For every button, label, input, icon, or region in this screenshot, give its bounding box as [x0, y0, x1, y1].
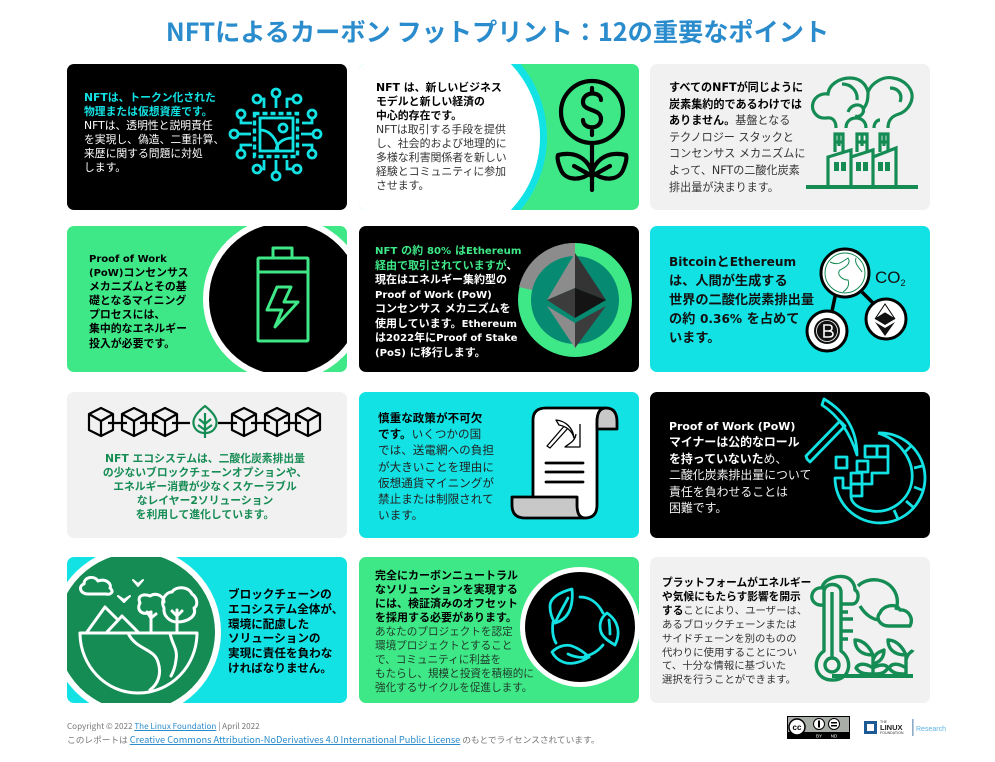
text: proof of work energy: プロセスには、 [89, 308, 165, 321]
text: careful policy: います。 [378, 508, 423, 522]
panel: proof of work energy [67, 226, 347, 372]
text: ecosystem responsibility: ソリューションの [228, 631, 321, 645]
icon: circuit chip with image [228, 88, 322, 182]
text: miners accountability: マイナーは公的なロール [669, 435, 800, 449]
text: careful policy: が大きいことを理由に [378, 460, 494, 474]
text: proof of work energy: Proof of Work [89, 254, 167, 265]
text: NFT definition: を実現し、偽造、二重計算、 [84, 133, 224, 146]
icon: pickaxe and crescent coin [804, 398, 926, 524]
text: NFT definition [84, 91, 224, 174]
text: ethereum share: コンセンサス メカニズムを [375, 302, 511, 315]
text: bitcoin and ethereum emissions: います。 [669, 331, 720, 346]
text: new business model: 経験とコミュニティに参加 [376, 165, 506, 178]
text: carbon neutral offsets: には、検証済みのオフセット [375, 597, 518, 610]
text: miners accountability: Proof of Work (PoW) [669, 420, 795, 433]
text: ecosystem evolving [103, 452, 307, 521]
text: ecosystem responsibility: ブロックチェーンの [228, 587, 332, 601]
title: NFTによるカーボン フットプリント：12の重要なポイント [166, 13, 829, 49]
text: platform disclosure: サイドチェーンを別のものの [662, 633, 797, 645]
text: ethereum share: 経由で取引されていますが、 [375, 258, 517, 272]
text: ecosystem evolving: なレイヤー2ソリューション [137, 494, 273, 507]
panel: ecosystem evolving [67, 392, 347, 538]
text: platform disclosure: することにより、ユーザーは、 [662, 604, 807, 617]
panel: platform disclosure [650, 557, 930, 703]
text: ecosystem responsibility: 実現に責任を負わな [228, 646, 332, 660]
text: carbon neutral offsets: あなたのプロジェクトを認定 [375, 626, 513, 638]
panel: miners accountability [650, 392, 930, 538]
text: not all NFTs equal: よって、NFTの二酸化炭素 [669, 164, 800, 177]
panel: new business model [359, 64, 639, 210]
text: not all NFTs equal: 炭素集約的であるわけでは [669, 98, 802, 111]
footer: copyright and license [67, 721, 600, 746]
text: carbon neutral offsets: もたらし、規模と投資を積極的に [375, 668, 534, 680]
text: bitcoin and ethereum emissions: BitcoinとEthereum [669, 255, 796, 270]
text: ethereum share: は2022年にProof of Stake [375, 331, 517, 344]
text: ethereum share: 現在はエネルギー集約型の [375, 273, 507, 286]
text: NFT definition: します。 [84, 161, 126, 174]
text: new business model [376, 81, 507, 192]
icon: factory with smoke [806, 76, 918, 189]
text: ecosystem responsibility: エコシステム全体が、 [228, 602, 343, 616]
text: careful policy: です。いくつかの国 [378, 427, 481, 441]
icon: landscape with trees [78, 576, 198, 694]
text: NFT definition: 来歴に関する問題に対処 [84, 147, 203, 160]
text: carbon neutral offsets: 完全にカーボンニュートラル [375, 569, 518, 582]
icon: battery with bolt [256, 246, 310, 342]
text: miners accountability: を持っていないため、 [669, 452, 787, 466]
text: not all NFTs equal: コンセンサス メカニズムに [669, 147, 805, 160]
icon: ethereum ring [518, 243, 632, 357]
icon: creative commons badge: ND [831, 734, 838, 738]
text: bitcoin and ethereum emissions: は、人間が生成する [669, 274, 788, 289]
text: platform disclosure: や気候にもたらす影響を開示 [662, 590, 801, 603]
text: carbon neutral offsets: 環境プロジェクトとすること [375, 640, 512, 652]
text: proof of work energy: メカニズムとその基 [89, 280, 187, 293]
icon: dollar flower [556, 78, 628, 192]
text: ecosystem responsibility: 環境に配慮した [228, 617, 309, 631]
text: ecosystem evolving: エネルギー消費が少なくスケーラブル [113, 480, 297, 493]
text: not all NFTs equal: テクノロジー スタックと [669, 131, 794, 144]
text: miners accountability: 責任を負わせることは [669, 485, 788, 499]
text: NFT definition: NFTは、トークン化された [84, 91, 216, 104]
text: new business model: モデルと新しい経済の [376, 95, 485, 108]
text: new business model: 中心的存在です。 [376, 109, 462, 122]
logo: Linux Foundation Research: LINUX [880, 723, 902, 732]
icon: creative commons badge [787, 716, 850, 739]
panel: ecosystem responsibility [67, 557, 347, 703]
text: platform disclosure: あるブロックチェーンまたは [662, 619, 797, 631]
text: new business model: させます。 [376, 179, 429, 192]
text: new business model: し、社会的および地理的に [376, 137, 507, 150]
text: carbon neutral offsets: なソリューションを実現する [375, 583, 518, 596]
text: ethereum share: (PoS) に移行します。 [375, 346, 486, 358]
text: platform disclosure: 選択を行うことができます。 [662, 674, 796, 686]
text: carbon neutral offsets: で、コミュニティに利益を [375, 654, 501, 666]
text: proof of work energy: 礎となるマイニング [89, 294, 186, 307]
text: ecosystem evolving: NFT エコシステムは、二酸化炭素排出量 [105, 452, 305, 465]
text: proof of work energy: 投入が必要です。 [89, 337, 175, 350]
text: new business model: NFTは取引する手段を提供 [376, 123, 506, 136]
panel: careful policy [359, 392, 639, 538]
icon: globe, bitcoin, ethereum, CO2 [806, 248, 908, 352]
label: CO2: CO [875, 268, 900, 287]
footer: copyright and license: Copyright © 2022 The Linux Foundation | April 2022 [67, 721, 260, 732]
text: carbon neutral offsets [375, 569, 534, 694]
text: proof of work energy: 集中的なエネルギー [89, 322, 187, 335]
text: ethereum share [375, 244, 521, 358]
icon: scroll with pickaxe [510, 406, 618, 520]
text: bitcoin and ethereum emissions: の約 0.36% を占めて [669, 312, 799, 327]
icon: creative commons badge: BY [816, 734, 822, 738]
panel: carbon neutral offsets [359, 557, 639, 703]
text: proof of work energy [89, 254, 189, 350]
icon: thermometer, clouds and plants [810, 574, 914, 682]
text: miners accountability [669, 420, 811, 515]
text: ethereum share: NFT の約 80% はEthereum [375, 244, 521, 257]
label: CO2: 2 [900, 278, 906, 288]
footer: copyright and license: このレポートは Creative Commons Attribution-NoDerivatives 4.0 International Public License のもとでライセンスされています。 [67, 732, 600, 746]
text: not all NFTs equal: ありません。基盤となる [669, 114, 790, 127]
text: proof of work energy: (PoW)コンセンサス [89, 266, 189, 279]
text: not all NFTs equal: すべてのNFTが同じように [669, 81, 803, 94]
text: ecosystem responsibility [228, 587, 343, 675]
text: careful policy: 慎重な政策が不可欠 [378, 411, 482, 425]
panel: bitcoin and ethereum emissions [650, 226, 930, 372]
text: miners accountability: 困難です。 [669, 501, 727, 515]
text: ecosystem responsibility: ければなりません。 [228, 661, 332, 675]
text: carbon neutral offsets: 強化するサイクルを促進します。 [375, 682, 532, 694]
text: platform disclosure: て、十分な情報に基づいた [662, 660, 786, 672]
text: platform disclosure: 代わりに使用することについ [662, 647, 797, 659]
text: NFT definition: 物理または仮想資産です。 [84, 105, 212, 118]
icon: creative commons badge: cc [793, 723, 802, 732]
text: miners accountability: 二酸化炭素排出量について [669, 468, 811, 482]
text: new business model: NFT は、新しいビジネス [376, 81, 502, 94]
icon: leaf cycle [548, 588, 620, 665]
text: ecosystem evolving: の少ないブロックチェーンオプションや、 [103, 466, 307, 479]
text: not all NFTs equal [669, 80, 805, 194]
text: bitcoin and ethereum emissions [669, 255, 814, 346]
logo: Linux Foundation Research: FOUNDATION [880, 731, 904, 735]
panel: not all NFTs equal [650, 64, 930, 210]
text: bitcoin and ethereum emissions: 世界の二酸化炭素排出量 [669, 293, 814, 308]
text: careful policy: 禁止または制限されて [378, 492, 494, 506]
text: ethereum share: 使用しています。Ethereum [375, 316, 517, 330]
text: ethereum share: Proof of Work (PoW) [375, 290, 492, 300]
text: ecosystem evolving: を利用して進化しています。 [136, 508, 274, 521]
panel: NFT definition [67, 64, 347, 210]
text: careful policy: 仮想通貨マイニングが [378, 476, 494, 490]
text: NFT definition: NFTは、透明性と説明責任 [84, 119, 213, 132]
panel: ethereum share [359, 226, 639, 372]
text: new business model: 多様な利害関係者を新しい [376, 151, 507, 164]
icon: blockchain with leaf [88, 404, 322, 438]
text: careful policy: では、送電網への負担 [378, 443, 494, 457]
text: platform disclosure [662, 576, 811, 686]
logo: Linux Foundation Research [864, 719, 946, 736]
text: platform disclosure: プラットフォームがエネルギー [662, 576, 811, 589]
text: not all NFTs equal: 排出量が決まります。 [669, 181, 779, 194]
text: careful policy [378, 411, 494, 522]
logo: Linux Foundation Research: Research [916, 726, 946, 733]
text: carbon neutral offsets: を採用する必要があります。 [375, 611, 517, 624]
logo: Linux Foundation Research: THE [880, 720, 888, 724]
